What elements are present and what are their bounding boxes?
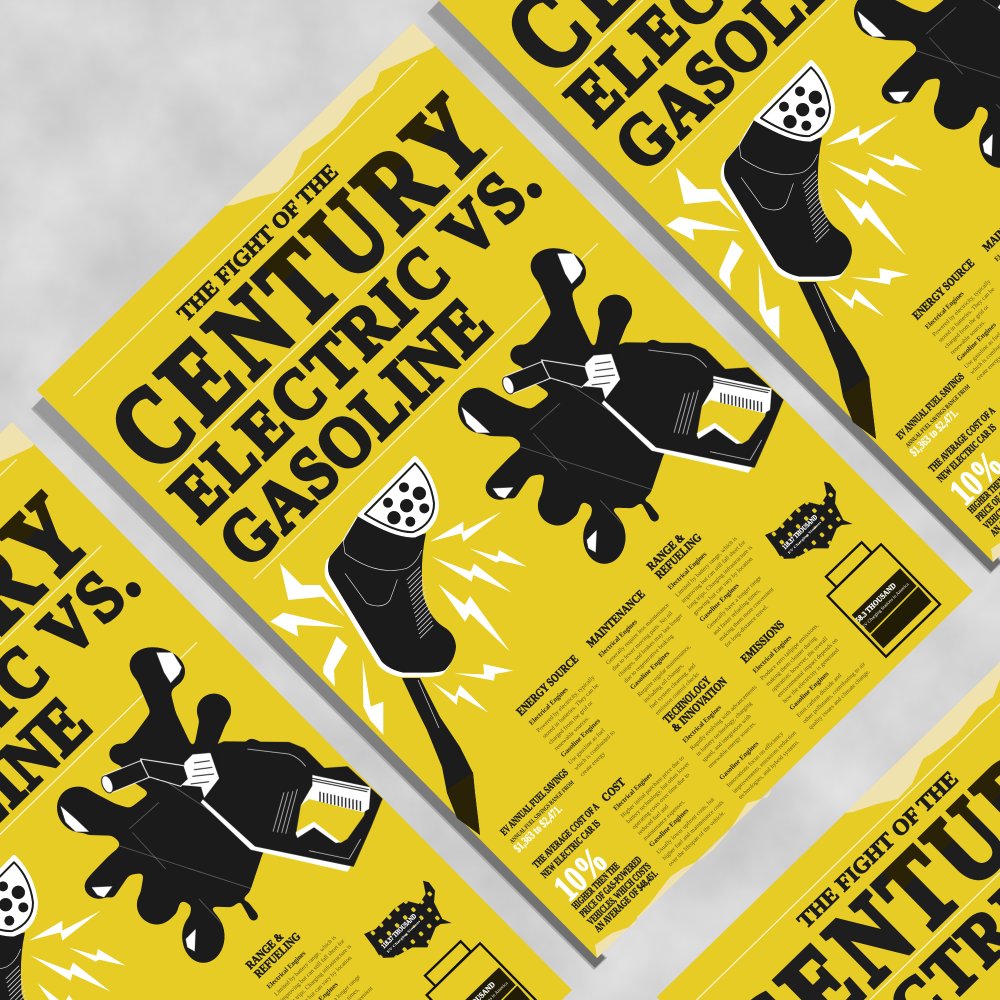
- section: emissions: EMISSIONS: [738, 617, 787, 666]
- section: energy source: charged from the grid or: [547, 700, 594, 746]
- gas nozzle: [500, 343, 782, 473]
- top right copy text: charged from the grid or: [943, 304, 990, 350]
- plug head outer: [360, 458, 437, 535]
- callout: ten percent cost: [530, 801, 664, 935]
- left copy text: Electrical Engines: [265, 949, 308, 991]
- battery icon: [826, 542, 940, 657]
- section: technology and innovation: Electrical Engines: [681, 703, 723, 745]
- section: maintenance: fuel system cleaning, and: [648, 662, 697, 710]
- callout: fuel savings: ANNUAL FUEL SAVINGS RANGE FROM: [509, 779, 576, 845]
- section: technology and innovation: Rapidly evolving with advancements: [689, 684, 759, 752]
- section: emissions: Electrical Engines: [751, 633, 793, 675]
- rule lines: [73, 60, 598, 579]
- callout: ten percent cost: THE AVERAGE COST OF A: [531, 801, 602, 871]
- poster copy: left: [0, 422, 572, 1000]
- section: cost: higher fuel and maintenance costs: [661, 799, 726, 862]
- section: energy source: [513, 652, 641, 779]
- section: emissions: environmental impact depends on: [776, 637, 839, 699]
- section: emissions: how the electricity is generated: [782, 647, 841, 705]
- callout: fuel savings: EV ANNUAL FUEL SAVINGS: [499, 767, 571, 838]
- left copy text: Limited by battery range, which is: [274, 935, 338, 998]
- top right copy text: Gasoline Engines: [955, 321, 998, 363]
- USA map: [765, 482, 853, 559]
- map and battery: [765, 482, 940, 657]
- nozzle chevron: [697, 423, 742, 444]
- section: cost: Higher initial purchase price due to: [620, 755, 686, 819]
- nozzle collar: [583, 353, 621, 400]
- cable highlight: [418, 680, 439, 728]
- nozzle window: [697, 387, 770, 444]
- section: emissions: Emit carbon dioxide and: [796, 673, 843, 719]
- section: emissions: [738, 596, 873, 731]
- section: technology and innovation: speed, and integration with: [701, 714, 753, 764]
- kicker: THE FIGHT OF THE: [172, 159, 343, 326]
- poster drop shadow: [31, 397, 607, 970]
- section: range and refueling: growing but can vary by location: [693, 556, 754, 617]
- section: maintenance: due to fewer moving parts. No oil: [611, 610, 675, 672]
- section: range and refueling: RANGE &: [644, 530, 687, 573]
- section: maintenance: Electrical Engines: [597, 618, 639, 659]
- top right copy text: [477, 0, 1000, 539]
- nozzle band line: [713, 379, 770, 393]
- section: maintenance: emission control checks: [655, 671, 701, 717]
- callout: ten percent cost: PRICE OF GAS-POWERED: [578, 855, 645, 920]
- section: emissions: other pollutants, contributing to air: [802, 661, 867, 725]
- splat highlights: [461, 253, 597, 552]
- section: range and refueling: Gasoline Engines: [698, 581, 741, 624]
- bottom right copy title: THE FIGHT OF THE: [792, 766, 963, 933]
- section: maintenance: Generally require less maintenance: [605, 602, 671, 666]
- battery case: [828, 544, 940, 657]
- section: cost: operating costs over time due to: [631, 772, 691, 831]
- nozzle tube: [542, 360, 589, 387]
- bottom right copy artwork: [651, 630, 1000, 1000]
- section: emissions: Produce zero tailpipe emissions,: [760, 622, 820, 682]
- top right copy text: $1,363 to $2,471.: [907, 406, 961, 459]
- lightning bolts: [270, 512, 527, 735]
- battery label: EV Charging Stations in America: [861, 582, 910, 629]
- illustrations: [270, 242, 782, 735]
- nozzle thin lines: [648, 350, 762, 460]
- spout opening: [500, 375, 516, 396]
- map label band: [783, 515, 822, 553]
- section: emissions: Gasoline Engines: [788, 670, 831, 712]
- section: maintenance: [584, 579, 722, 717]
- section: range and refueling: Electrical Engines: [666, 550, 709, 592]
- section: technology and innovation: improvements, emissions reduction: [732, 730, 798, 795]
- section: range and refueling: for long-distance travel.: [723, 603, 770, 649]
- plug body: [328, 514, 456, 673]
- electric plug: [325, 458, 456, 676]
- section: range and refueling: Generally have a longer range: [706, 575, 763, 631]
- top right copy text: stored in batteries. They can be: [938, 287, 997, 344]
- section: energy source: renewable sources.: [554, 715, 591, 752]
- section: cost: reduced fuel and: [636, 803, 670, 837]
- callout: ten percent cost: 10%: [546, 839, 616, 909]
- plug pins: [383, 482, 429, 527]
- nozzle trigger white band: [702, 376, 772, 413]
- section: cost: maintenance expenses.: [643, 799, 687, 842]
- top right copy text: Electrical Engines: [923, 289, 966, 331]
- main poster text: [75, 65, 949, 938]
- section: energy source: Gasoline Engines: [559, 717, 602, 759]
- section: maintenance: including oil changes,: [643, 662, 686, 704]
- nozzle body: [605, 343, 782, 467]
- left copy text: REFUELING: [251, 929, 303, 981]
- section: cost: Electrical Engines: [612, 771, 654, 812]
- section: range and refueling: making them more convenient: [718, 587, 776, 643]
- map label: 118.37 THOUSAND: [781, 513, 819, 551]
- section: energy source: Powered by electricity, typically: [536, 674, 597, 734]
- section: technology and innovation: in battery technology, charging: [695, 701, 754, 758]
- poster shadow band: [33, 397, 605, 968]
- map silhouette: [765, 482, 853, 559]
- section: cost: Usually lower upfront costs, but: [655, 796, 716, 856]
- section: range and refueling: and faster refueling times,: [711, 587, 762, 637]
- top right copy artwork: [427, 0, 1000, 574]
- section: range and refueling: Limited by battery range, which is: [675, 536, 739, 599]
- section: technology and innovation: renewable energy sources.: [707, 721, 758, 770]
- top right copy text: EV ANNUAL FUEL SAVINGS: [895, 371, 967, 442]
- nozzle spout: [504, 362, 550, 394]
- left copy artwork: [0, 422, 572, 1000]
- callout: fuel savings: $1,363 to $2,471.: [511, 802, 565, 855]
- section: energy source: Electrical Engines: [527, 685, 570, 727]
- section: maintenance: due to regenerative braking: [623, 634, 675, 685]
- callout: ten percent cost: NEW ELECTRIC CAR IS: [539, 818, 603, 881]
- title: century: CENTURY: [86, 74, 512, 493]
- nozzle comb: [721, 393, 761, 412]
- callout: ten percent cost: VEHICLES, WHICH COSTS: [586, 861, 654, 928]
- poster copy: top right: [427, 0, 1000, 574]
- section: emissions: making them cleaner during: [765, 636, 818, 688]
- oil splat: [448, 242, 700, 564]
- top right copy text: Powered by electricity, typically: [932, 278, 993, 338]
- map label: [781, 513, 823, 555]
- section: technology and innovation: [659, 653, 807, 801]
- callout: fuel savings: [497, 767, 586, 855]
- battery charge level top: [852, 568, 917, 633]
- plug head: [365, 463, 434, 532]
- callout: ten percent cost: HIGHER THEN THE: [570, 861, 622, 912]
- section: energy source: which is combusted to: [573, 730, 617, 772]
- left copy text: [0, 470, 521, 1000]
- plug grip stripes: [407, 567, 433, 638]
- section: range and refueling: improving but can still fall short for: [680, 539, 747, 605]
- battery cap: [826, 542, 872, 587]
- section: technology and innovation: & INNOVATION: [668, 674, 730, 735]
- section: emissions: operation; however, the overall: [771, 636, 829, 693]
- section: energy source: ENERGY SOURCE: [513, 652, 581, 718]
- cable faded end: [447, 772, 480, 835]
- left copy text: EV Charging Stations: [386, 919, 422, 954]
- section: cost: over the lifespan of the vehicle.: [667, 809, 727, 868]
- plug white offset: [325, 518, 453, 676]
- splat scratches: [520, 383, 653, 523]
- torn corner: bottom: [595, 789, 772, 958]
- title: gasoline: GASOLINE: [203, 284, 506, 581]
- section: cost: [598, 734, 734, 869]
- battery label: 58.3 THOUSAND: [854, 581, 898, 624]
- section: energy source: stored in batteries. They can be: [542, 683, 601, 740]
- top right copy text: ENERGY SOURCE: [909, 256, 977, 322]
- section: emissions: quality issues and climate change.: [808, 669, 872, 731]
- section: range and refueling: REFUELING: [652, 530, 704, 582]
- section: technology and innovation: TECHNOLOGY: [660, 673, 714, 726]
- charger cable: [402, 678, 480, 835]
- section: technology and innovation: technologies, and hybrid systems.: [738, 739, 801, 801]
- left copy text: RANGE &: [243, 929, 286, 972]
- section: range and refueling: [644, 501, 792, 649]
- nozzle white edge: [602, 397, 754, 473]
- map label: EV Charging Stations: [787, 520, 823, 555]
- poster copy: bottom right: [651, 630, 1000, 1000]
- title: electric vs: ELECTRIC VS.: [157, 145, 554, 535]
- section: technology and innovation: Gasoline Engines: [718, 739, 761, 782]
- section: cost: Gasoline Engines: [647, 806, 690, 849]
- plug thin lines: [343, 530, 422, 606]
- section: energy source: Use gasoline as fuel: [567, 727, 607, 766]
- section: maintenance: Require regular maintenance,: [637, 644, 693, 698]
- top right copy text: renewable sources.: [950, 319, 987, 356]
- section: maintenance: Gasoline Engines: [628, 649, 671, 691]
- top right copy text: ANNUAL FUEL SAVINGS RANGE FROM: [905, 383, 972, 449]
- callout: ten percent cost: AN AVERAGE OF $48,451.: [593, 868, 661, 935]
- section: maintenance: changes, and brakes may last longer: [617, 613, 684, 678]
- section: energy source: create energy: [579, 751, 608, 778]
- left copy text: 118.37 THOUSAND: [380, 912, 418, 950]
- collar ribs: [592, 362, 615, 385]
- section: maintenance: MAINTENANCE: [584, 587, 648, 650]
- section: range and refueling: long trips. Charging infrastructure is: [686, 544, 755, 611]
- section: technology and innovation: Innovations focus on efficiency: [725, 730, 786, 789]
- torn corner: top: [225, 23, 435, 206]
- section: cost: COST: [598, 775, 628, 804]
- section: cost: battery technology, but often lower: [625, 761, 691, 825]
- map plug dots: [765, 482, 853, 559]
- battery charge level bottom: [871, 587, 932, 648]
